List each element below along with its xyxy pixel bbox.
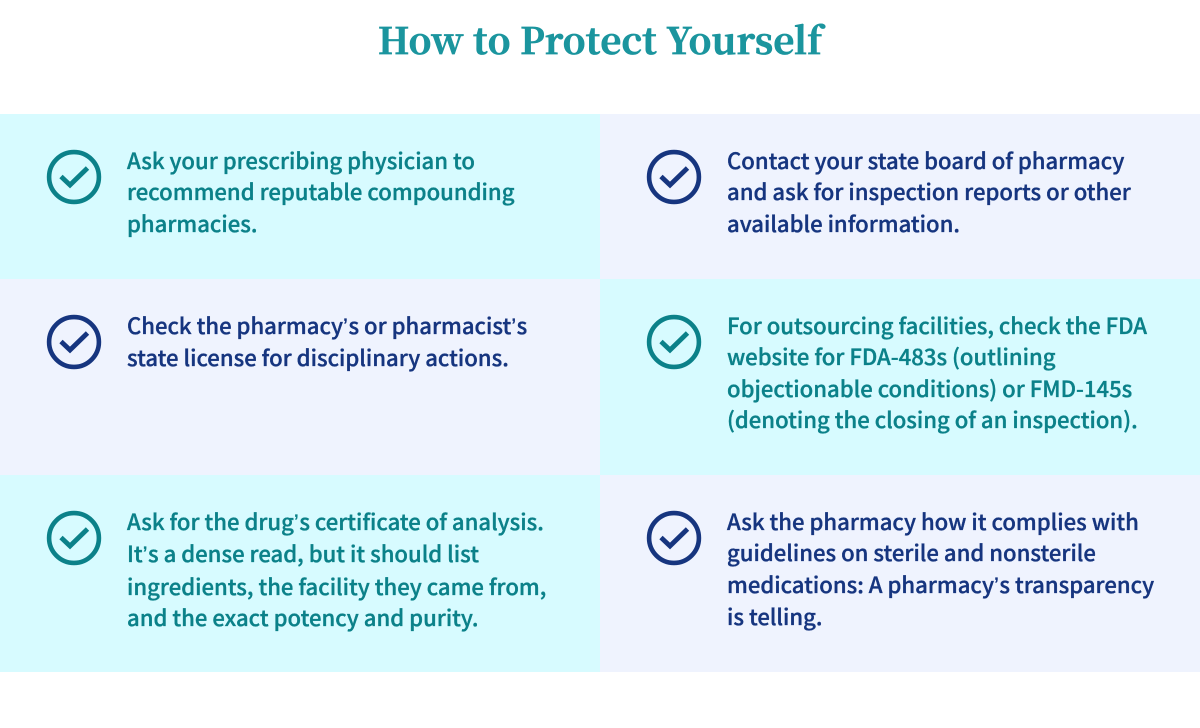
text: compliance: Ask the pharmacy how it complies with <box>727 505 1139 537</box>
text: compliance <box>726 505 1154 632</box>
panel: certificate of analysis <box>0 475 600 672</box>
panel: outsourcing facilities <box>600 279 1200 475</box>
text: state license: state license for disciplinary actions. <box>127 341 509 373</box>
text: compliance: guidelines on sterile and nonsterile <box>727 536 1096 568</box>
text: outsourcing facilities <box>727 309 1148 435</box>
text: state license: Check the pharmacy’s or pharmacist’s <box>127 309 527 341</box>
text: compliance: medications: A pharmacy’s transparency <box>727 568 1154 600</box>
text: state board: Contact your state board of pharmacy <box>727 144 1124 176</box>
panel: compliance <box>600 475 1200 672</box>
panel: state license <box>0 279 600 475</box>
panel: ask physician <box>0 114 600 279</box>
text: certificate of analysis: It’s a dense read, but it should list <box>127 537 479 569</box>
text: outsourcing facilities: (denoting the closing of an inspection). <box>727 403 1138 435</box>
text: ask physician: pharmacies. <box>127 207 257 239</box>
text: certificate of analysis: Ask for the drug’s certificate of analysis. <box>127 505 544 537</box>
text: certificate of analysis <box>126 505 546 633</box>
icon: check circle <box>646 510 702 566</box>
text: state board: and ask for inspection reports or other <box>727 175 1131 207</box>
icon: check circle <box>46 150 102 204</box>
panel: state board <box>600 114 1200 279</box>
text: compliance: is telling. <box>727 600 822 632</box>
icon: check circle <box>646 314 702 370</box>
text: certificate of analysis: ingredients, the facility they came from, <box>127 570 546 602</box>
text: ask physician: recommend reputable compounding <box>127 175 514 207</box>
text: outsourcing facilities: website for FDA-483s (outlining <box>727 340 1056 372</box>
text: state board: available information. <box>727 207 960 239</box>
text: ask physician <box>126 144 514 239</box>
text: certificate of analysis: and the exact potency and purity. <box>127 601 478 633</box>
text: outsourcing facilities: objectionable conditions) or FMD-145s <box>727 372 1132 404</box>
text: ask physician: Ask your prescribing physician to <box>127 144 475 176</box>
title: How to Protect Yourself <box>378 13 822 65</box>
text: outsourcing facilities: For outsourcing facilities, check the FDA <box>727 309 1147 341</box>
icon: check circle <box>646 150 702 204</box>
icon: check circle <box>46 510 102 566</box>
text: state board <box>727 144 1131 239</box>
text: state license <box>127 309 527 373</box>
icon: check circle <box>46 314 102 370</box>
